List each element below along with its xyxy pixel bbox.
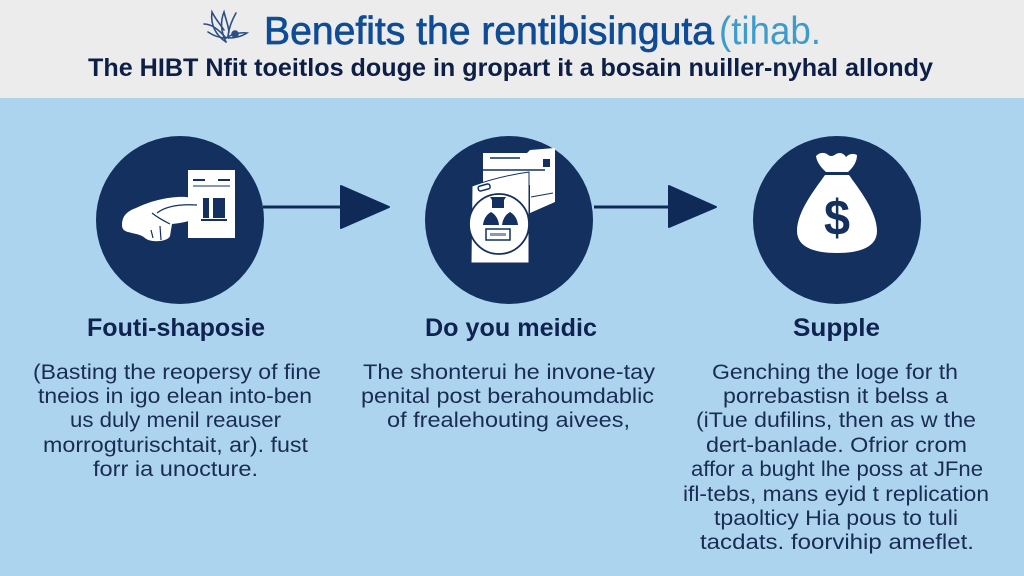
body text: column 3: (iTue dufilins, then as w the <box>696 409 976 432</box>
body text: column 2: penital post berahoumdablic <box>361 385 654 408</box>
body text: column 1: (Basting the reopersy of fine <box>33 361 321 384</box>
body text: column 1: forr ia unocture. <box>93 458 258 481</box>
column 3 text <box>683 314 989 554</box>
arrow 2 <box>594 186 716 227</box>
body text: column 3: affor a bught lhe poss at JFne <box>691 458 983 481</box>
body text: column 1 <box>33 361 321 481</box>
body text: column 3: tacdats. foorvihip ameflet. <box>700 531 974 554</box>
step 2 icon: documents with badge <box>425 136 593 304</box>
column 2 text <box>361 314 656 432</box>
body text: column 2: of frealehouting aivees, <box>387 409 630 432</box>
step 3 icon: money bag: $ <box>824 190 850 246</box>
panel: header <box>0 0 1024 98</box>
body text: column 3: Genching the loge for th <box>712 361 958 384</box>
body text: column 3: dert-banlade. Ofrior crom <box>706 434 967 457</box>
body text: column 1: us duly menil reauser <box>70 409 281 432</box>
subtitle: The HIBT Nfit toeitlos douge in gropart it a bosain nuiller-nyhal allondy <box>88 54 933 82</box>
body text: column 3: ifl-tebs, mans eyid t replication <box>683 483 989 506</box>
body text: column 1: morrogturischtait, ar). fust <box>43 434 308 457</box>
body text: column 2: The shonterui he invone-tay <box>363 361 656 384</box>
body text: column 3: tpaolticy Hia pous to tuli <box>714 507 958 530</box>
body text: column 1: tneios in igo elean into-ben <box>38 385 312 408</box>
body text: column 2 <box>361 361 656 432</box>
heading: column 2: Do you meidic <box>425 314 597 342</box>
heading: column 3: Supple <box>793 314 880 342</box>
step 1 icon: hand on document <box>96 136 264 304</box>
heading: column 1: Fouti-shaposie <box>87 314 265 342</box>
column 1 text <box>33 314 321 481</box>
title: Benefits the rentibisinguta <box>264 10 714 53</box>
body text: column 3 <box>683 361 989 554</box>
step 3 icon: money bag <box>753 136 921 304</box>
body text: column 3: porrebastisn it belss a <box>723 385 948 408</box>
icon: floral emblem <box>204 12 247 42</box>
title: (tihab. <box>719 10 821 53</box>
arrow 1 <box>263 186 389 228</box>
